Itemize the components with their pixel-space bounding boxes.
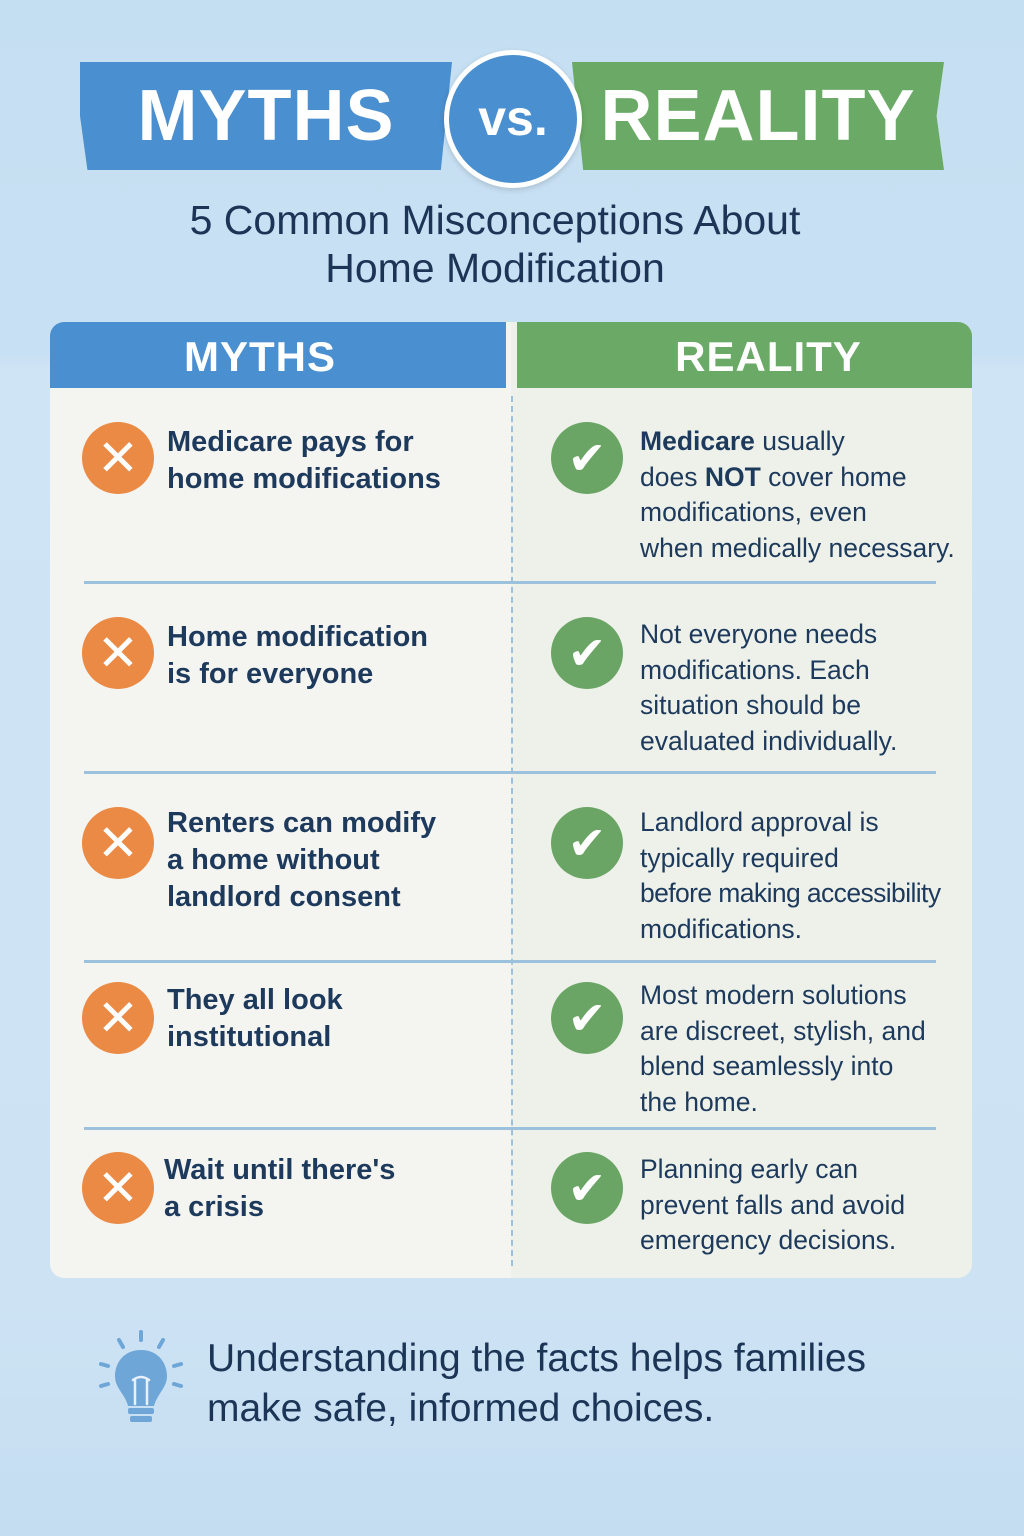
icon: x: ✕ xyxy=(97,430,139,486)
vs badge xyxy=(444,50,582,188)
reality text: when medically necessary. xyxy=(640,532,955,562)
footer message: make safe, informed choices. xyxy=(207,1387,714,1430)
row 3 xyxy=(82,807,941,944)
reality text: does NOT cover home xyxy=(640,462,907,492)
reality text: modifications, even xyxy=(640,497,867,527)
myth text: home modifications xyxy=(167,463,441,495)
icon: x: ✕ xyxy=(97,625,139,681)
icon: lightbulb xyxy=(99,1330,183,1422)
title banner: myths: MYTHS xyxy=(138,76,394,156)
row 5 xyxy=(82,1152,905,1255)
reality text: Medicare usually xyxy=(640,426,845,456)
reality text: modifications. xyxy=(640,914,802,944)
row 1 xyxy=(82,422,955,562)
icon: x xyxy=(82,617,154,689)
reality text: are discreet, stylish, and xyxy=(640,1016,926,1046)
row 2 xyxy=(82,617,897,756)
icon: check: ✔ xyxy=(568,817,606,869)
myth text xyxy=(167,621,428,690)
reality text: Most modern solutions xyxy=(640,980,907,1010)
icon: check xyxy=(551,807,623,879)
myth text: Home modification xyxy=(167,621,428,653)
header: reality xyxy=(517,322,972,388)
row 4 xyxy=(82,980,926,1116)
reality text: typically required xyxy=(640,842,839,872)
myth text: is for everyone xyxy=(167,658,373,690)
icon: check: ✔ xyxy=(568,627,606,679)
icon: x: ✕ xyxy=(97,1160,139,1216)
icon: x xyxy=(82,982,154,1054)
subtitle: Home Modification xyxy=(325,245,665,291)
footer message xyxy=(207,1337,866,1430)
myth text: landlord consent xyxy=(167,881,401,913)
myth text: institutional xyxy=(167,1021,331,1053)
myth text xyxy=(167,807,436,913)
reality text: emergency decisions. xyxy=(640,1225,896,1255)
icon: check: ✔ xyxy=(568,432,606,484)
icon: x: ✕ xyxy=(97,990,139,1046)
icon: check xyxy=(551,617,623,689)
reality text: evaluated individually. xyxy=(640,726,897,756)
vs badge: vs. xyxy=(478,90,548,146)
myth text: a crisis xyxy=(164,1191,264,1223)
row separators xyxy=(84,581,936,584)
myth text: a home without xyxy=(167,844,380,876)
reality text xyxy=(640,426,955,562)
header: myths xyxy=(50,322,506,388)
icon: check xyxy=(551,422,623,494)
icon: check xyxy=(551,1152,623,1224)
comparison table panel xyxy=(50,322,972,1278)
subtitle: 5 Common Misconceptions About xyxy=(190,197,800,243)
panel body xyxy=(50,322,972,1278)
myth text xyxy=(167,426,441,495)
icon: x xyxy=(82,807,154,879)
footer message: Understanding the facts helps families xyxy=(207,1337,866,1380)
header: reality: REALITY xyxy=(675,333,862,380)
header: myths: MYTHS xyxy=(184,333,336,380)
reality text: Not everyone needs xyxy=(640,619,877,649)
reality text: blend seamlessly into xyxy=(640,1051,893,1081)
myth text xyxy=(164,1154,395,1223)
myth text: Wait until there's xyxy=(164,1154,395,1186)
icon: x: ✕ xyxy=(97,815,139,871)
reality text: prevent falls and avoid xyxy=(640,1190,905,1220)
reality text: modifications. Each xyxy=(640,654,870,684)
myth text: Renters can modify xyxy=(167,807,436,839)
reality text: before making accessibility xyxy=(640,878,940,908)
title banner: reality xyxy=(572,62,944,170)
icon: check: ✔ xyxy=(568,992,606,1044)
reality text: Planning early can xyxy=(640,1154,858,1184)
icon: x xyxy=(82,422,154,494)
title banner: reality: REALITY xyxy=(600,76,916,156)
reality text xyxy=(640,619,897,756)
column divider xyxy=(511,396,513,1266)
subtitle xyxy=(190,197,800,291)
reality text xyxy=(640,980,926,1116)
reality text: situation should be xyxy=(640,690,861,720)
reality text: the home. xyxy=(640,1086,758,1116)
icon: check xyxy=(551,982,623,1054)
reality text xyxy=(640,1154,905,1255)
reality text: Landlord approval is xyxy=(640,807,879,837)
reality text xyxy=(640,807,941,944)
myth text: Medicare pays for xyxy=(167,426,414,458)
icon: check: ✔ xyxy=(568,1162,606,1214)
myth text xyxy=(167,984,343,1053)
icon: x xyxy=(82,1152,154,1224)
title banner: myths xyxy=(80,62,452,170)
myth text: They all look xyxy=(167,984,343,1016)
